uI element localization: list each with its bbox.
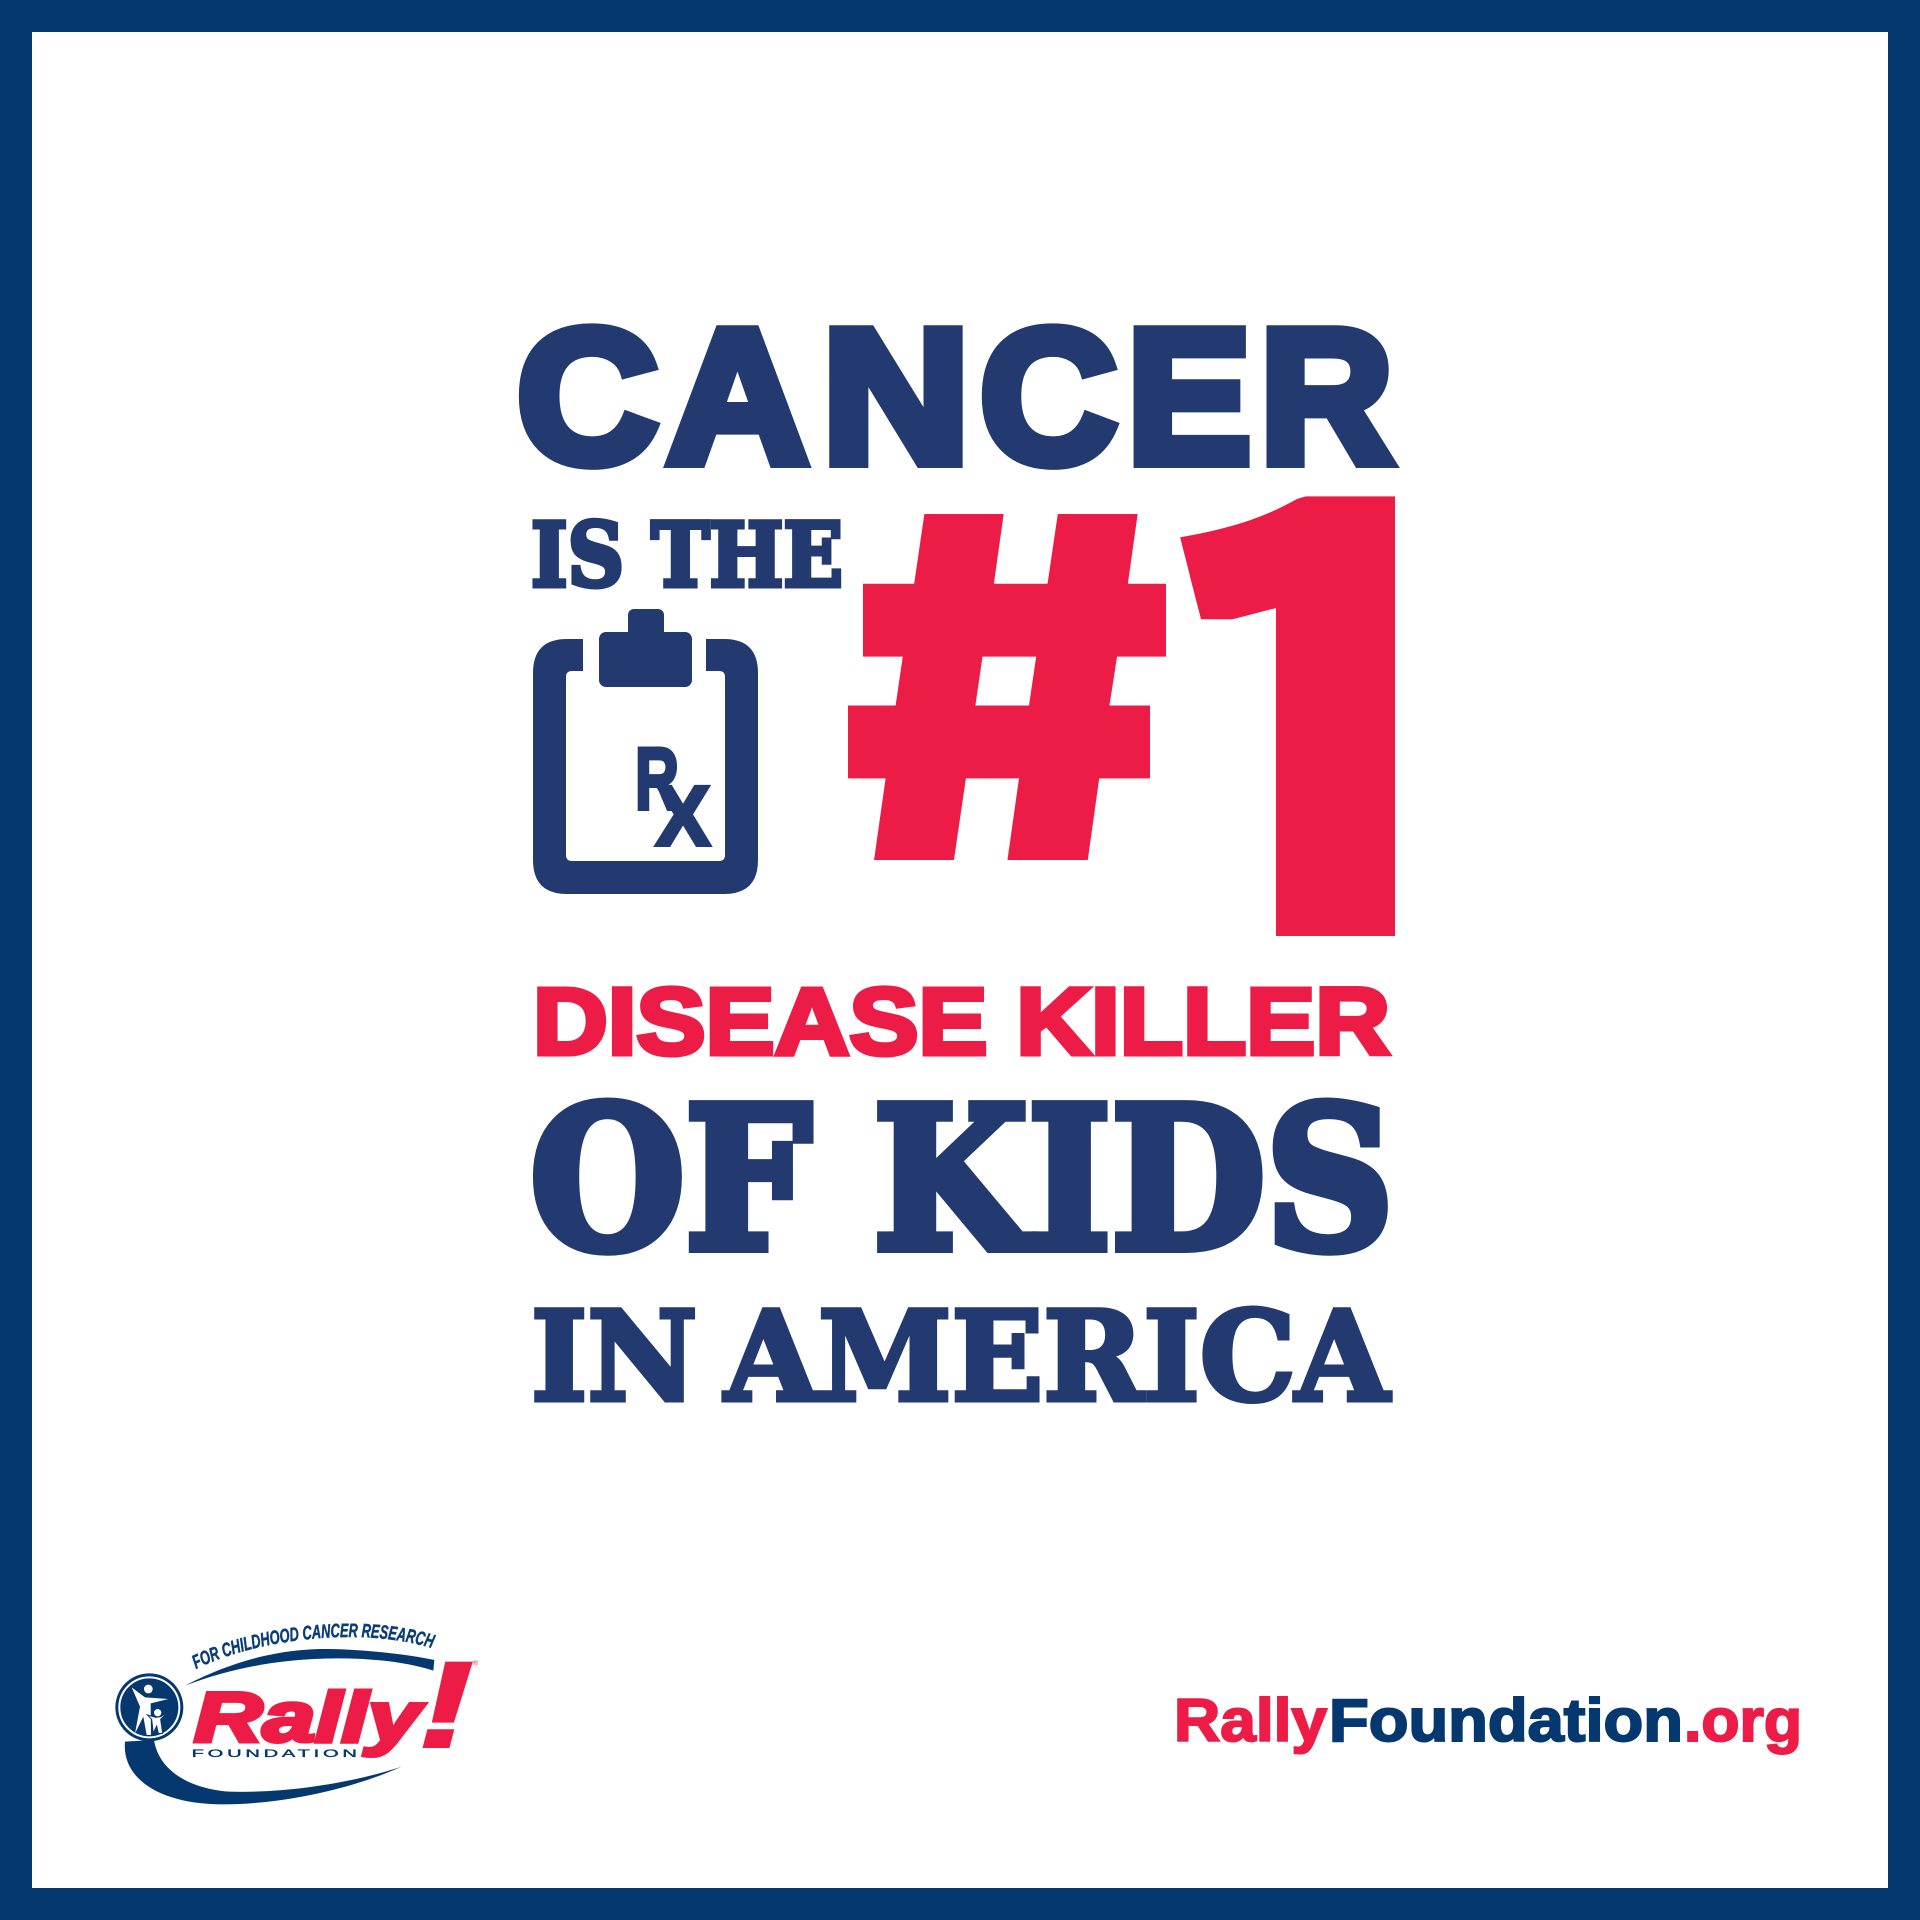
logo: Rally Foundation — [115, 1623, 479, 1804]
heading: CANCER: N — [822, 291, 970, 503]
icon: clipboard with Rx — [533, 609, 758, 894]
website url: Rally — [1174, 1687, 1328, 1754]
headline number: #1: # — [819, 278, 1195, 1031]
heading: IS THE: IS THE — [531, 503, 843, 607]
headline number: #1 — [819, 256, 1508, 1093]
heading: IN AMERICA: IN AMERICA — [531, 1285, 1391, 1430]
logo registered mark: ® — [473, 1659, 479, 1668]
logo exclamation mark: ! — [418, 1637, 473, 1773]
headline number: #1: 1 — [1128, 256, 1508, 1093]
website url — [1174, 1687, 1802, 1754]
logo wordmark: Rally: Rally — [194, 1677, 426, 1756]
logo upper swoosh — [185, 1649, 434, 1686]
heading: CANCER: C — [980, 291, 1117, 503]
heading: CANCER: A — [667, 291, 808, 503]
logo tagline: FOR CHILDHOOD CANCER RESEARCH — [192, 1623, 436, 1670]
heading: CANCER: C — [517, 291, 658, 503]
website url: .org — [1684, 1687, 1802, 1754]
heading: DISEASE KILLER: DISEASE KILLER — [533, 969, 1390, 1075]
icon: clipboard with Rx: R — [635, 729, 679, 828]
logo emblem: adult and child — [115, 1673, 183, 1741]
icon: clipboard with Rx: X — [656, 769, 710, 863]
heading: OF KIDS: OF KIDS — [530, 1065, 1394, 1295]
heading: CANCER: E — [1127, 291, 1251, 503]
heading: CANCER: R — [1260, 291, 1393, 503]
logo lower swoosh — [125, 1740, 402, 1804]
website url: Foundation — [1329, 1687, 1683, 1754]
logo word: FOUNDATION: FOUNDATION — [192, 1748, 361, 1760]
